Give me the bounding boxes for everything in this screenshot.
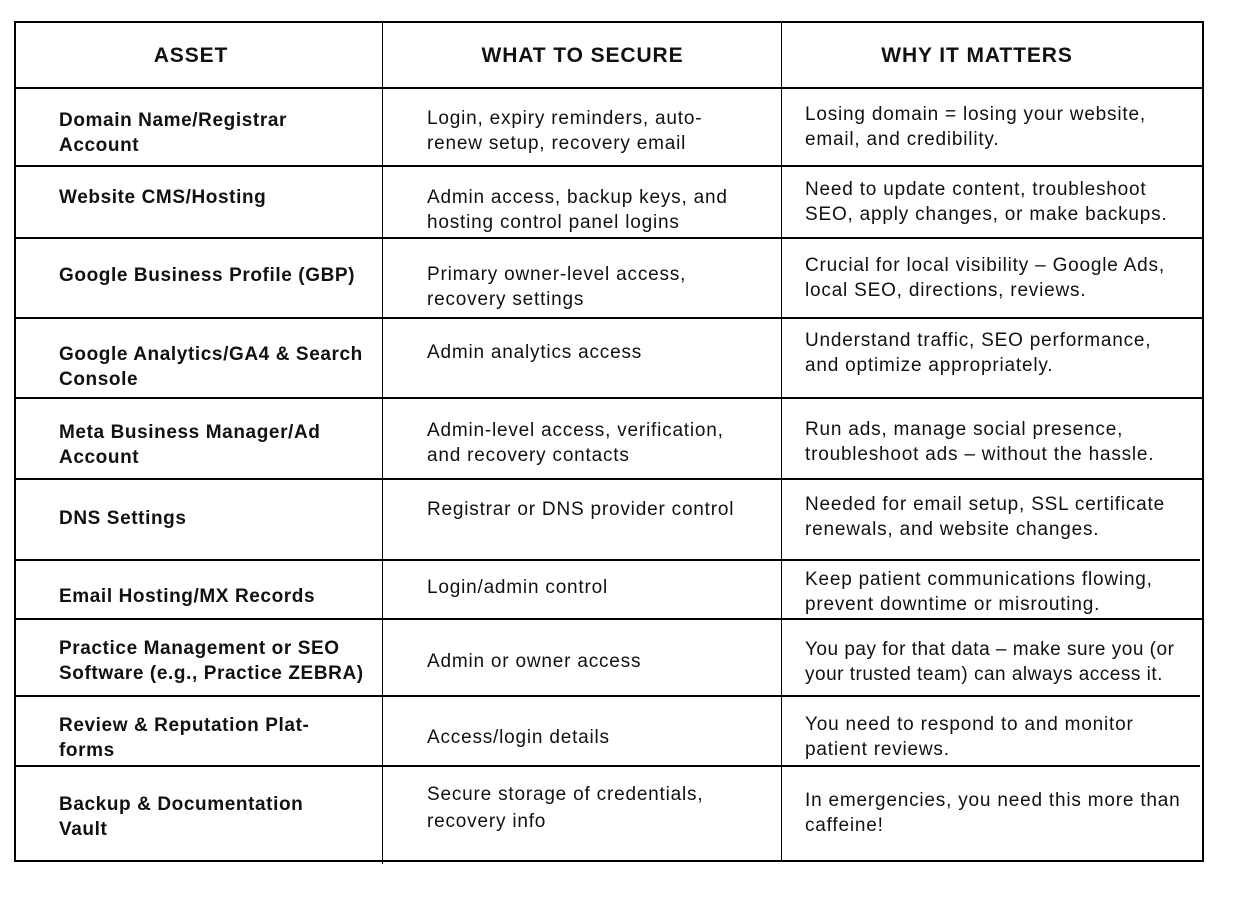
row 6 why [805, 494, 1165, 540]
row 8 asset: Practice Management or SEO [59, 638, 340, 659]
row 7 why [805, 569, 1153, 615]
row 3 asset: Google Business Profile (GBP) [59, 265, 355, 286]
row 3 secure: recovery settings [427, 289, 584, 310]
row 9 asset: Review & Reputation Plat- [59, 715, 309, 736]
row 9 asset: forms [59, 740, 115, 761]
row 5 asset: Account [59, 447, 139, 468]
row 4 why [805, 330, 1151, 376]
row 7 secure: Login/admin control [427, 577, 608, 598]
row 8 why [805, 639, 1174, 685]
row 2 why: Need to update content, troubleshoot [805, 179, 1146, 200]
row 10 asset: Vault [59, 819, 107, 840]
row 4 asset: Google Analytics/GA4 & Search [59, 344, 363, 365]
row 8 asset [59, 638, 364, 684]
header: why it matters: WHY IT MATTERS [881, 44, 1073, 67]
row 8 why: You pay for that data – make sure you (or [805, 639, 1174, 660]
row 7 why: prevent downtime or misrouting. [805, 594, 1100, 615]
row 1 asset [59, 110, 287, 156]
row 1 asset: Account [59, 135, 139, 156]
row 3 why [805, 255, 1165, 301]
row 6 secure: Registrar or DNS provider control [427, 499, 734, 520]
row 10 why [805, 790, 1181, 836]
row 4 secure: Admin analytics access [427, 342, 642, 363]
row 3 secure: Primary owner-level access, [427, 264, 686, 285]
row 5 why: troubleshoot ads – without the hassle. [805, 444, 1154, 465]
row 5 secure: and recovery contacts [427, 445, 630, 466]
row 8 secure: Admin or owner access [427, 651, 641, 672]
row 8 asset: Software (e.g., Practice ZEBRA) [59, 663, 364, 684]
row 10 asset: Backup & Documentation [59, 794, 303, 815]
row 1 why: Losing domain = losing your website, [805, 104, 1146, 125]
row 6 why: renewals, and website changes. [805, 519, 1099, 540]
row 3 why: Crucial for local visibility – Google Ads, [805, 255, 1165, 276]
row 6 asset: DNS Settings [59, 508, 187, 529]
row 2 secure [427, 187, 728, 233]
row 9 why: patient reviews. [805, 739, 950, 760]
row 10 why: In emergencies, you need this more than [805, 790, 1181, 811]
row 3 why: local SEO, directions, reviews. [805, 280, 1086, 301]
row 2 secure: Admin access, backup keys, and [427, 187, 728, 208]
row 5 why [805, 419, 1154, 465]
row 1 secure: renew setup, recovery email [427, 133, 686, 154]
row 5 secure: Admin-level access, verification, [427, 420, 724, 441]
row 1 why [805, 104, 1146, 150]
row 5 secure [427, 420, 724, 466]
row 9 secure: Access/login details [427, 727, 610, 748]
row 10 secure: Secure storage of credentials, [427, 784, 703, 805]
row 2 secure: hosting control panel logins [427, 212, 680, 233]
row 10 secure: recovery info [427, 811, 546, 832]
row 1 asset: Domain Name/Registrar [59, 110, 287, 131]
row 10 why: caffeine! [805, 815, 884, 836]
row 2 asset: Website CMS/Hosting [59, 187, 266, 208]
row 9 why: You need to respond to and monitor [805, 714, 1134, 735]
row 3 secure [427, 264, 686, 310]
row 2 why: SEO, apply changes, or make backups. [805, 204, 1168, 225]
row 1 secure [427, 108, 702, 154]
row 6 why: Needed for email setup, SSL certificate [805, 494, 1165, 515]
row 4 asset [59, 344, 363, 390]
row 2 why [805, 179, 1168, 225]
row 5 asset [59, 422, 320, 468]
row 7 asset: Email Hosting/MX Records [59, 586, 315, 607]
row 5 asset: Meta Business Manager/Ad [59, 422, 320, 443]
row 4 why: Understand traffic, SEO performance, [805, 330, 1151, 351]
row 4 asset: Console [59, 369, 138, 390]
row 10 secure [427, 784, 703, 832]
row 9 why [805, 714, 1134, 760]
row 1 why: email, and credibility. [805, 129, 999, 150]
row 9 asset [59, 715, 309, 761]
row 10 asset [59, 794, 303, 840]
row 1 secure: Login, expiry reminders, auto- [427, 108, 702, 129]
header: what to secure: WHAT TO SECURE [482, 44, 684, 67]
row 5 why: Run ads, manage social presence, [805, 419, 1123, 440]
row 8 why: your trusted team) can always access it. [805, 664, 1163, 685]
row 7 why: Keep patient communications flowing, [805, 569, 1153, 590]
header: asset: ASSET [154, 44, 228, 67]
row 4 why: and optimize appropriately. [805, 355, 1053, 376]
